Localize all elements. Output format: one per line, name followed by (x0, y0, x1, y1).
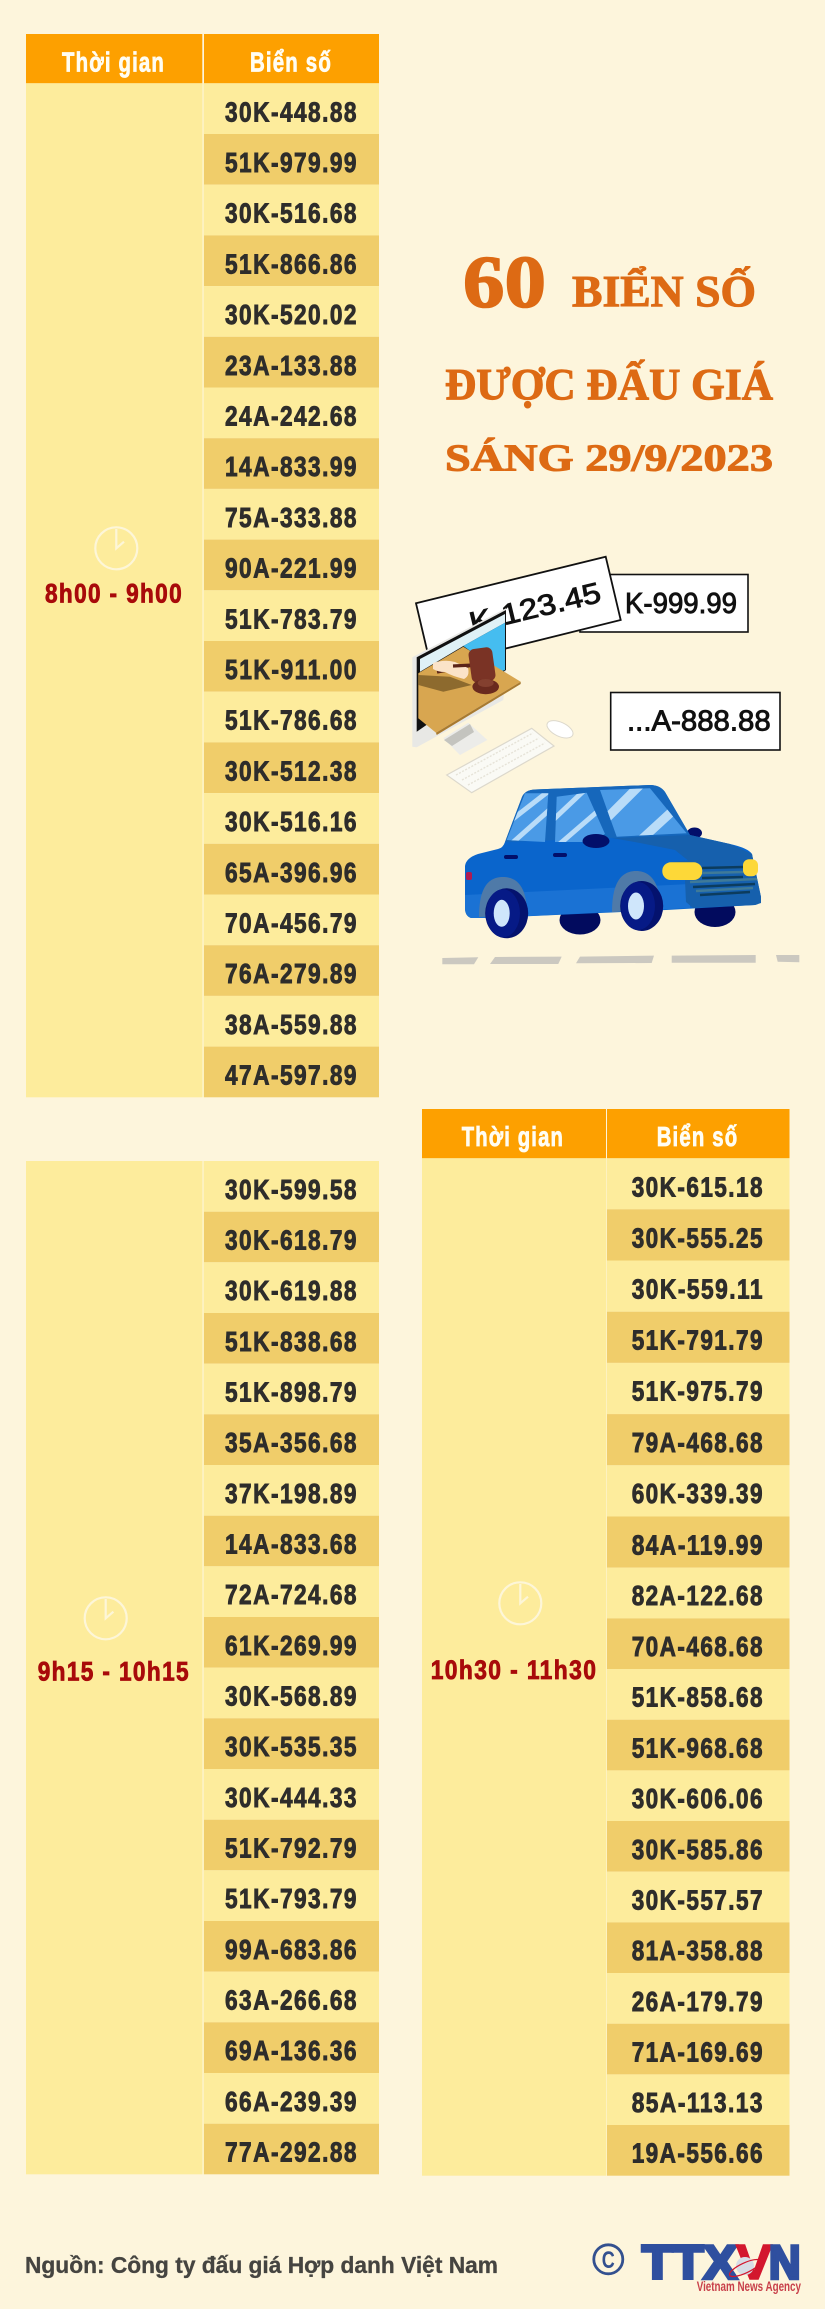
row: 51K-968.68: 51K-968.68 (632, 1732, 764, 1763)
row: 30K-615.18 (607, 1158, 790, 1209)
row: 30K-619.88 (204, 1262, 379, 1313)
header: Biển số: Biển số (657, 1121, 738, 1152)
time column: 8h00 - 9h00 (26, 83, 202, 1097)
header: Thời gian: Thời gian (462, 1121, 564, 1152)
row: 61K-269.99: 61K-269.99 (225, 1630, 358, 1661)
row: 30K-606.06: 30K-606.06 (632, 1783, 764, 1814)
time column: 10h30 - 11h30 (422, 1158, 606, 2176)
row: 30K-444.33: 30K-444.33 (225, 1782, 358, 1813)
road markings (442, 955, 799, 964)
plate: A-888.88: ...A-888.88 (627, 706, 771, 738)
row: 75A-333.88 (204, 489, 379, 540)
logo: TTXVN: TTX (642, 2236, 737, 2288)
row: 30K-585.86 (607, 1821, 790, 1872)
row: 30K-448.88: 30K-448.88 (225, 97, 358, 128)
row: 30K-615.18: 30K-615.18 (632, 1172, 764, 1203)
icon: blue car (465, 775, 761, 938)
row: 30K-585.86: 30K-585.86 (632, 1834, 764, 1865)
row: 30K-568.89: 30K-568.89 (225, 1680, 358, 1712)
row: 77A-292.88: 77A-292.88 (225, 2136, 358, 2168)
row: 72A-724.68: 72A-724.68 (225, 1579, 358, 1610)
row: 30K-618.79: 30K-618.79 (225, 1224, 358, 1256)
panel: table 9h15 - 10h15 (26, 1161, 379, 2174)
header: Thời gian: Thời gian (62, 47, 165, 78)
row: 23A-133.88 (204, 337, 379, 388)
time column: 9h15 - 10h15 (26, 1161, 202, 2174)
row: 30K-559.11: 30K-559.11 (632, 1274, 764, 1304)
row: 84A-119.99 (607, 1516, 790, 1568)
row: 37K-198.89: 37K-198.89 (225, 1478, 358, 1509)
row: 30K-512.38: 30K-512.38 (225, 755, 358, 786)
row: 51K-786.68: 51K-786.68 (225, 705, 358, 736)
row: 51K-786.68 (204, 692, 379, 742)
row: 19A-556.66 (607, 2125, 790, 2176)
row: 51K-866.86: 51K-866.86 (225, 248, 358, 279)
header: Thời gian (422, 1109, 606, 1158)
title: SÁNG 29/9/2023 (445, 438, 773, 480)
time column: 8h00 - 9h00: 8h00 - 9h00 (45, 579, 183, 609)
row: 24A-242.68: 24A-242.68 (225, 400, 358, 432)
row: 79A-468.68 (607, 1414, 790, 1465)
row: 82A-122.68: 82A-122.68 (632, 1580, 764, 1611)
plate: A-888.88 (611, 692, 780, 750)
row: 60K-339.39 (607, 1465, 790, 1516)
row: 81A-358.88 (607, 1922, 790, 1973)
row: 30K-520.02: 30K-520.02 (225, 299, 358, 330)
row: 24A-242.68 (204, 388, 379, 438)
row: 71A-169.69: 71A-169.69 (632, 2036, 764, 2068)
row: 90A-221.99 (204, 540, 379, 590)
header: Biển số: Biển số (250, 47, 332, 78)
row: 51K-793.79 (204, 1870, 379, 1921)
source note: Nguồn: Công ty đấu giá Hợp danh Việt Nam (25, 2252, 498, 2278)
row: 47A-597.89: 47A-597.89 (225, 1060, 358, 1091)
row: 66A-239.39: 66A-239.39 (225, 2086, 358, 2117)
row: 51K-975.79: 51K-975.79 (632, 1376, 764, 1407)
logo: TTXVN: V (736, 2236, 772, 2290)
row: 60K-339.39: 60K-339.39 (632, 1478, 764, 1509)
row: 30K-516.16: 30K-516.16 (225, 806, 358, 837)
title (445, 242, 773, 480)
panel: table 8h00 - 9h00 (26, 34, 379, 1097)
row: 23A-133.88: 23A-133.88 (225, 350, 358, 381)
row: 81A-358.88: 81A-358.88 (632, 1935, 764, 1966)
row: 38A-559.88 (204, 996, 379, 1047)
icon: copyright: C (602, 2247, 615, 2274)
row: 65A-396.96 (204, 844, 379, 894)
row: 30K-599.58 (204, 1161, 379, 1212)
row: 51K-792.79: 51K-792.79 (225, 1832, 358, 1864)
logo: TTXVN: N (769, 2236, 800, 2288)
row: 79A-468.68: 79A-468.68 (632, 1427, 764, 1458)
row: 30K-606.06 (607, 1770, 790, 1821)
row: 99A-683.86: 99A-683.86 (225, 1934, 358, 1965)
row: 82A-122.68 (607, 1568, 790, 1618)
row: 35A-356.68 (204, 1414, 379, 1465)
logo: TTXVN (594, 2236, 801, 2294)
title: BIỂN SỐ (572, 265, 756, 316)
row: 51K-792.79 (204, 1820, 379, 1870)
row: 51K-793.79: 51K-793.79 (225, 1883, 358, 1914)
header: Biển số (607, 1109, 790, 1158)
row: 70A-468.68: 70A-468.68 (632, 1631, 764, 1662)
row: 26A-179.79 (607, 1973, 790, 2024)
row: 19A-556.66: 19A-556.66 (632, 2138, 764, 2169)
row: 51K-858.68 (607, 1669, 790, 1720)
header: Thời gian (26, 34, 202, 83)
title: ĐƯỢC ĐẤU GIÁ (445, 359, 773, 409)
row: 69A-136.36 (204, 2022, 379, 2073)
row: 51K-783.79: 51K-783.79 (225, 603, 358, 634)
row: 99A-683.86 (204, 1921, 379, 1972)
row: 26A-179.79: 26A-179.79 (632, 1986, 764, 2017)
row: 14A-833.68 (204, 1516, 379, 1566)
row: 69A-136.36: 69A-136.36 (225, 2035, 358, 2066)
row: 30K-535.35 (204, 1718, 379, 1769)
row: 30K-619.88: 30K-619.88 (225, 1275, 358, 1306)
row: 47A-597.89 (204, 1047, 379, 1097)
row: 84A-119.99: 84A-119.99 (632, 1529, 764, 1560)
row: 30K-568.89 (204, 1668, 379, 1718)
row: 51K-898.79 (204, 1364, 379, 1414)
icon: computer with auction gavel (412, 608, 576, 793)
row: 30K-444.33 (204, 1769, 379, 1820)
row: 30K-516.68 (204, 185, 379, 235)
row: 30K-557.57 (607, 1872, 790, 1922)
row: 51K-911.00 (204, 641, 379, 692)
row: 30K-516.68: 30K-516.68 (225, 198, 358, 229)
row: 51K-858.68: 51K-858.68 (632, 1682, 764, 1713)
row: 51K-911.00: 51K-911.00 (225, 654, 358, 685)
row: 30K-555.25: 30K-555.25 (632, 1222, 764, 1253)
row: 38A-559.88: 38A-559.88 (225, 1009, 358, 1040)
row: 71A-169.69 (607, 2024, 790, 2074)
row: 30K-520.02 (204, 286, 379, 337)
row: 72A-724.68 (204, 1566, 379, 1617)
row: 70A-456.79: 70A-456.79 (225, 908, 358, 938)
plate: K-999.99 (580, 574, 748, 632)
row: 30K-555.25 (607, 1209, 790, 1260)
row: 30K-557.57: 30K-557.57 (632, 1884, 764, 1916)
row: 51K-979.99 (204, 134, 379, 185)
time column: 9h15 - 10h15: 9h15 - 10h15 (38, 1657, 190, 1687)
row: 63A-266.68 (204, 1972, 379, 2022)
plate: K-999.99: K-999.99 (625, 588, 737, 620)
row: 51K-791.79: 51K-791.79 (632, 1325, 764, 1356)
row: 51K-838.68: 51K-838.68 (225, 1326, 358, 1357)
row: 66A-239.39 (204, 2073, 379, 2124)
row: 75A-333.88: 75A-333.88 (225, 502, 358, 533)
row: 61K-269.99 (204, 1617, 379, 1668)
row: 85A-113.13 (607, 2074, 790, 2125)
row: 30K-618.79 (204, 1212, 379, 1262)
row: 51K-838.68 (204, 1313, 379, 1364)
row: 51K-898.79: 51K-898.79 (225, 1376, 358, 1408)
row: 51K-979.99: 51K-979.99 (225, 147, 358, 178)
row: 35A-356.68: 35A-356.68 (225, 1427, 358, 1458)
row: 76A-279.89: 76A-279.89 (225, 958, 358, 989)
row: 90A-221.99: 90A-221.99 (225, 553, 358, 584)
row: 14A-833.99 (204, 438, 379, 489)
row: 76A-279.89 (204, 945, 379, 996)
row: 51K-783.79 (204, 590, 379, 641)
title: 60 (463, 242, 546, 324)
row: 30K-448.88 (204, 83, 379, 134)
row: 30K-559.11 (607, 1260, 790, 1312)
row: 30K-535.35: 30K-535.35 (225, 1731, 358, 1762)
panel: table 10h30 - 11h30 (422, 1109, 790, 2176)
row: 70A-456.79 (204, 894, 379, 945)
header: Biển số (204, 34, 379, 83)
time column: 10h30 - 11h30: 10h30 - 11h30 (431, 1655, 597, 1685)
row: 70A-468.68 (607, 1618, 790, 1669)
plate: rotated K-123.45: K-123.45 (466, 577, 604, 640)
row: 65A-396.96: 65A-396.96 (225, 857, 358, 888)
row: 30K-512.38 (204, 742, 379, 793)
row: 14A-833.99: 14A-833.99 (225, 451, 358, 482)
row: 37K-198.89 (204, 1465, 379, 1516)
row: 85A-113.13: 85A-113.13 (632, 2087, 764, 2118)
row: 51K-975.79 (607, 1363, 790, 1414)
row: 30K-516.16 (204, 793, 379, 844)
plate: rotated K-123.45 (416, 557, 621, 667)
row: 30K-599.58: 30K-599.58 (225, 1174, 358, 1205)
row: 77A-292.88 (204, 2124, 379, 2174)
row: 51K-866.86 (204, 235, 379, 286)
row: 51K-968.68 (607, 1720, 790, 1770)
row: 63A-266.68: 63A-266.68 (225, 1984, 358, 2016)
icon: copyright (594, 2245, 623, 2274)
row: 14A-833.68: 14A-833.68 (225, 1528, 358, 1560)
row: 51K-791.79 (607, 1312, 790, 1363)
